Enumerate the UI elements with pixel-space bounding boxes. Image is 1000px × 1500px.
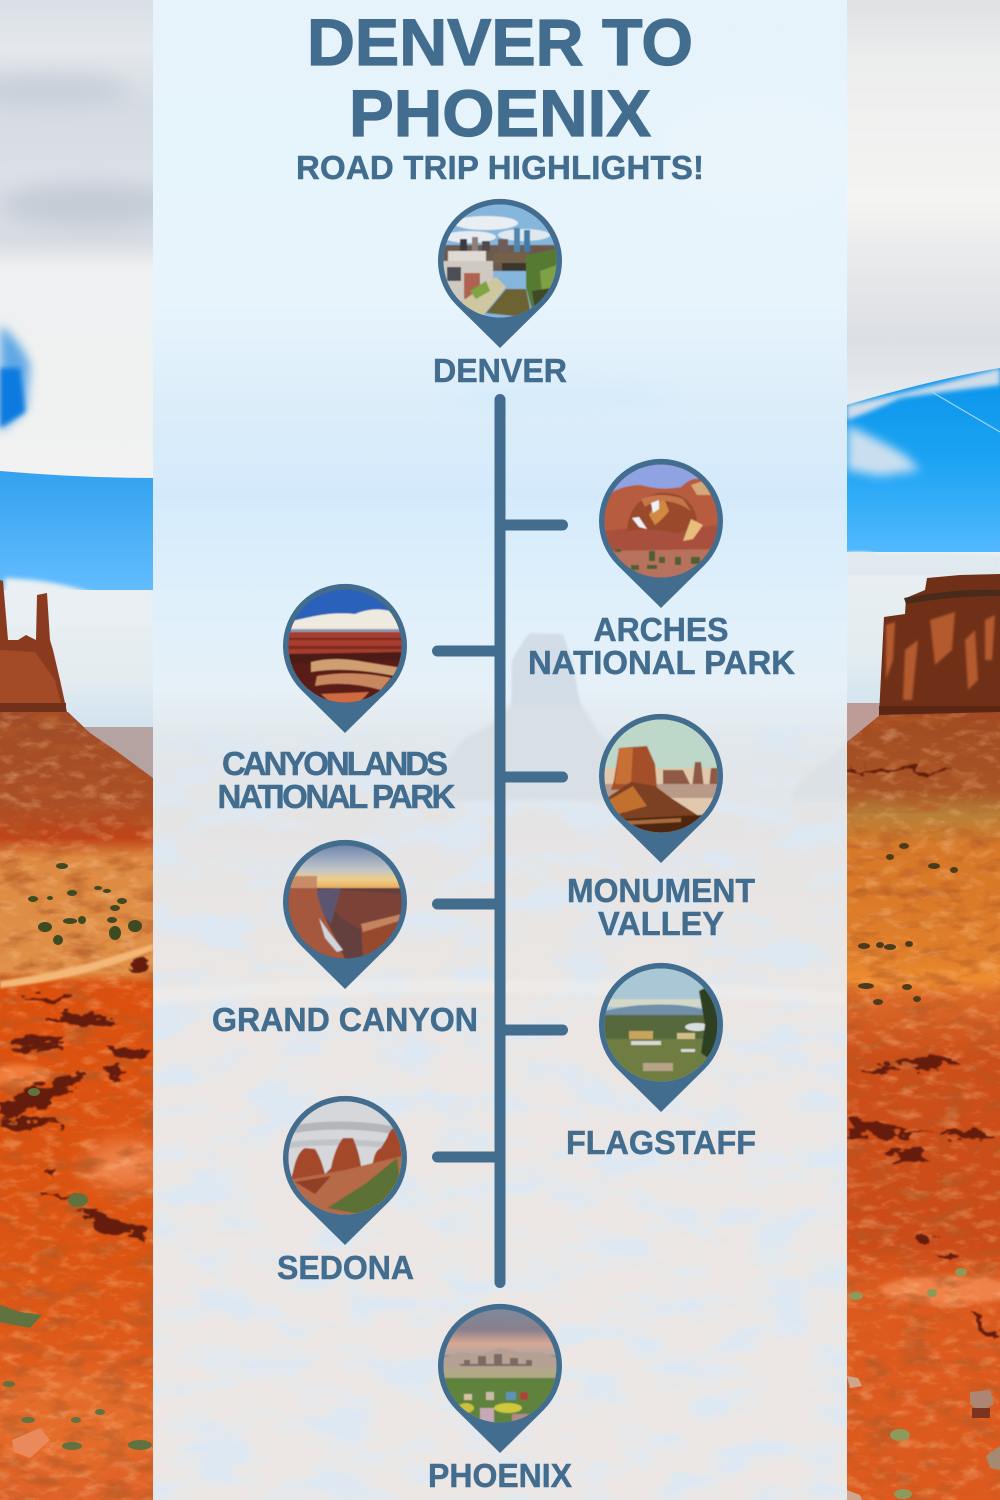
label: Grand Canyon: GRAND CANYON (212, 1001, 478, 1038)
title line two: PHOENIX (349, 76, 651, 150)
pin: Phoenix (438, 1304, 562, 1453)
label: Canyonlands National Park (218, 745, 456, 815)
label: Monument Valley (567, 872, 755, 942)
timeline spine and branches (432, 394, 568, 1288)
pin: Arches National Park (599, 459, 723, 608)
photo: Denver skyline (443, 204, 557, 318)
photo: double arch (604, 464, 718, 578)
translucent centre panel (153, 0, 870, 1500)
photo: Monument Valley butte (604, 719, 718, 833)
pin: Canyonlands National Park (283, 584, 407, 733)
label: Canyonlands National Park: NATIONAL PARK (218, 778, 456, 815)
label: Canyonlands National Park: CANYONLANDS (222, 745, 448, 782)
title line one: DENVER TO (307, 5, 693, 79)
pin: Sedona (283, 1096, 407, 1245)
left ground (0, 712, 165, 1500)
label: Flagstaff: FLAGSTAFF (566, 1124, 756, 1161)
label: Denver: DENVER (433, 352, 567, 389)
pin: Flagstaff (599, 963, 723, 1112)
title (296, 5, 704, 186)
pin: Grand Canyon (283, 840, 407, 989)
photo: Phoenix skyline (443, 1309, 557, 1423)
background photo: Monument Valley right strip (847, 0, 1000, 1500)
photo: Flagstaff town (604, 968, 718, 1082)
background photo: Monument Valley left strip (0, 0, 153, 1500)
label: Phoenix: PHOENIX (428, 1457, 572, 1494)
photo: canyon overlook (288, 589, 402, 703)
pin: Denver (438, 199, 562, 348)
label: Monument Valley: VALLEY (598, 905, 724, 942)
label: Arches National Park: ARCHES (594, 611, 728, 648)
label: Sedona: SEDONA (277, 1249, 414, 1286)
label: Arches National Park (528, 611, 795, 681)
label: Arches National Park: NATIONAL PARK (528, 644, 795, 681)
label: Monument Valley: MONUMENT (567, 872, 755, 909)
photo: Sedona red rocks (288, 1101, 402, 1215)
pin: Monument Valley (599, 714, 723, 863)
subtitle: ROAD TRIP HIGHLIGHTS! (296, 149, 704, 186)
photo: Grand Canyon at dusk (288, 845, 402, 959)
right ground (847, 712, 1000, 1500)
